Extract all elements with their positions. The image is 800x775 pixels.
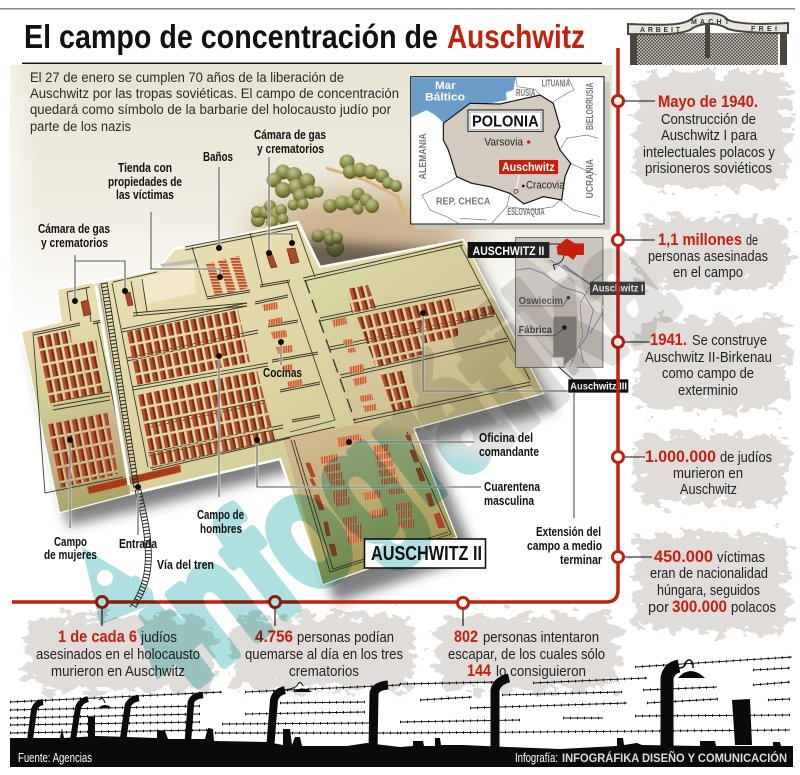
top rule	[0, 8, 795, 10]
camp labels: Campo de	[197, 508, 244, 522]
inset map: Fábrica	[519, 325, 552, 336]
fact: 450.000: 450.000	[654, 547, 713, 566]
fact: 802: lo consiguieron	[496, 664, 586, 680]
intro text: Auschwitz por las tropas soviéticas. El campo de concentración	[30, 86, 399, 101]
sea	[411, 77, 516, 123]
country labels: ALEMANIA	[418, 133, 429, 179]
tag: Auschwitz II	[468, 242, 549, 258]
fact: 1,1 millones	[648, 230, 768, 281]
railway inside camp	[96, 282, 139, 488]
fact: 450.000: polacos	[731, 600, 776, 616]
entrance building	[87, 465, 181, 494]
crematoria	[81, 248, 299, 316]
camp labels: Cámara de gas	[38, 222, 110, 236]
inset map	[468, 237, 645, 393]
fact: 1941: exterminio	[678, 383, 738, 399]
intro text: quedará como símbolo de la barbarie del holocausto judío por	[30, 102, 391, 117]
neighbour borders	[422, 77, 600, 224]
fact: 802: 802	[454, 627, 478, 646]
panel: background cream	[10, 65, 612, 335]
title	[22, 18, 602, 64]
lamps	[88, 660, 752, 745]
fact: 450.000: húngara, seguidos	[657, 583, 760, 599]
fact: 4.756: quemarse al día en los tres	[245, 647, 403, 663]
fact: 450.000: eran de nacionalidad	[650, 566, 768, 582]
fact: 1,1 millones: en el campo	[673, 265, 743, 281]
country labels: RUSIA	[516, 88, 535, 99]
fact: 1941: 1941.	[650, 330, 687, 349]
camp labels: de mujeres	[44, 548, 97, 562]
camp labels: masculina	[484, 494, 535, 508]
gate: Arbeit macht frei	[628, 13, 788, 65]
fact: 1941: Se construye	[692, 333, 767, 349]
fact: Mayo de 1940: prisioneros soviéticos	[645, 161, 772, 177]
gate: Arbeit macht frei: FREI	[751, 26, 777, 33]
fact: Mayo de 1940: intelectuales polacos y	[643, 145, 776, 161]
fact: 1941: como campo de	[662, 366, 754, 382]
camp labels: Vía del tren	[157, 558, 214, 572]
camp labels: Cuarentena	[484, 480, 541, 494]
fact: 802	[448, 627, 605, 680]
fact: 4.756: personas podían	[297, 630, 394, 646]
title: Auschwitz	[447, 18, 585, 55]
fact: 1.000.000	[645, 447, 772, 498]
fact: 450.000: víctimas	[717, 550, 765, 566]
camp labels: hombres	[200, 522, 242, 536]
country labels	[418, 79, 596, 218]
camp labels: Extensión del	[536, 525, 601, 539]
fact: 1.000.000: murieron en	[673, 466, 743, 482]
trees and road	[251, 154, 404, 257]
map of Poland	[411, 77, 610, 229]
camp labels: Baños	[203, 150, 233, 164]
intro text: parte de los nazis	[30, 119, 131, 134]
silhouette: barbed wire fence: INFOGRÁFIKA DISEÑO Y COMUNICACIÓN	[562, 752, 787, 765]
fact: 4.756: crematorios	[289, 664, 359, 680]
gray splash blobs	[26, 72, 788, 690]
fact: 1941	[645, 330, 772, 399]
north east zone	[303, 240, 543, 428]
fact: Mayo de 1940: Construcción de	[661, 112, 756, 128]
fact: 1,1 millones: personas asesinadas	[648, 249, 768, 265]
fact: 1 de cada 6: asesinados en el holocausto	[36, 647, 200, 663]
camp labels: y crematorios	[257, 142, 324, 156]
fact: Mayo de 1940: Auschwitz I para	[661, 128, 758, 144]
camp ground	[22, 222, 543, 584]
watermark	[82, 190, 701, 718]
fact: 450.000	[648, 547, 776, 616]
country labels: Mar	[435, 80, 456, 92]
camp labels: terminar	[560, 553, 602, 567]
Poland	[443, 95, 571, 204]
map of Poland: POLONIA	[472, 113, 539, 130]
fact: 1 de cada 6: judíos	[140, 630, 177, 646]
cities: Varsovia	[484, 136, 524, 148]
timeline	[12, 48, 655, 626]
map of Poland: Auschwitz	[502, 161, 555, 174]
tag: Auschwitz I	[563, 265, 593, 287]
fact: 4.756	[245, 627, 403, 680]
fact: 1.000.000: de judíos	[720, 450, 772, 466]
country labels: REP. CHECA	[436, 197, 490, 208]
label POLONIA	[468, 110, 543, 131]
camp labels	[38, 128, 602, 572]
south zone	[283, 425, 456, 584]
country labels: LITUANIA	[542, 79, 570, 90]
small buildings	[206, 256, 248, 296]
fact: 1.000.000: 1.000.000	[645, 447, 716, 466]
fact: 802: escapar, de los cuales sólo	[448, 647, 605, 663]
fact: Mayo de 1940	[643, 92, 776, 177]
camp labels: Entrada	[119, 537, 158, 551]
title: El campo de concentración de	[24, 18, 438, 55]
label: AUSCHWITZ II: AUSCHWITZ II	[371, 543, 482, 565]
fact: 4.756: 4.756	[255, 627, 293, 646]
pale yard	[140, 264, 196, 304]
red camp marker	[557, 238, 584, 260]
fact: 1941: Auschwitz II-Birkenau	[645, 350, 772, 366]
silhouette: barbed wire fence	[10, 657, 793, 767]
camp plan: Auschwitz II	[22, 222, 543, 584]
camp labels: y crematorios	[41, 236, 108, 250]
fact: 1,1 millones: 1,1 millones	[658, 230, 742, 249]
walls	[33, 225, 531, 572]
camp labels: campo a medio	[527, 539, 602, 553]
country labels: ESLOVAQUIA	[507, 207, 545, 218]
leader lines and dots	[70, 157, 573, 535]
fact: 1.000.000: Auschwitz	[680, 482, 737, 498]
fact: 802: personas intentaron	[483, 630, 599, 646]
camp labels: Oficina del	[479, 431, 533, 445]
label: AUSCHWITZ II	[364, 539, 486, 568]
fact: 1 de cada 6: 1 de cada 6	[58, 627, 137, 646]
camp labels: Cámara de gas	[254, 128, 326, 142]
country labels: Báltico	[425, 92, 465, 104]
inset map: Auschwitz III	[570, 381, 627, 392]
fact: 450.000: por	[648, 600, 669, 616]
tag: Auschwitz III	[558, 367, 573, 380]
fact: 1 de cada 6	[36, 627, 200, 680]
fact: 450.000: 300.000	[672, 597, 727, 616]
camp labels: Campo	[54, 535, 87, 549]
source text: Fuente: Agencias	[18, 751, 92, 765]
map of Poland: Cracovia	[526, 179, 565, 191]
watermark dot	[97, 570, 113, 586]
factory	[553, 317, 577, 367]
camp labels: comandante	[479, 445, 539, 459]
intro text	[30, 70, 399, 134]
inset map: Auschwitz I	[592, 284, 644, 295]
camp labels: propiedades de	[108, 175, 182, 189]
gate: Arbeit macht frei: MACHT	[691, 19, 730, 26]
camp labels: Cocinas	[263, 366, 302, 380]
silhouette: barbed wire fence: Infografía:	[515, 751, 558, 765]
poles	[30, 666, 679, 750]
fact: 1 de cada 6: murieron en Auschwitz	[51, 664, 185, 680]
barbs	[10, 657, 792, 733]
fact: 802: 144	[467, 661, 491, 680]
inset map: AUSCHWITZ II	[473, 245, 544, 258]
wires	[10, 657, 792, 733]
ground	[10, 728, 793, 767]
camp labels: Tienda con	[118, 161, 172, 175]
camp shadow	[30, 240, 556, 603]
women zone	[22, 283, 130, 512]
rail band	[520, 250, 602, 373]
camp labels: las víctimas	[116, 188, 174, 202]
inset map: Oswiecim	[519, 296, 563, 307]
intro text: El 27 de enero se cumplen 70 años de la liberación de	[30, 70, 344, 85]
country labels: BIELORRUSIA	[585, 83, 596, 130]
barracks rows	[37, 285, 496, 488]
gate: Arbeit macht frei: ARBEIT	[640, 27, 681, 34]
fact: Mayo de 1940: Mayo de 1940.	[658, 92, 758, 111]
railway track outside	[130, 490, 151, 607]
country labels: UCRANIA	[585, 159, 596, 198]
fact: 1,1 millones: de	[746, 233, 758, 249]
